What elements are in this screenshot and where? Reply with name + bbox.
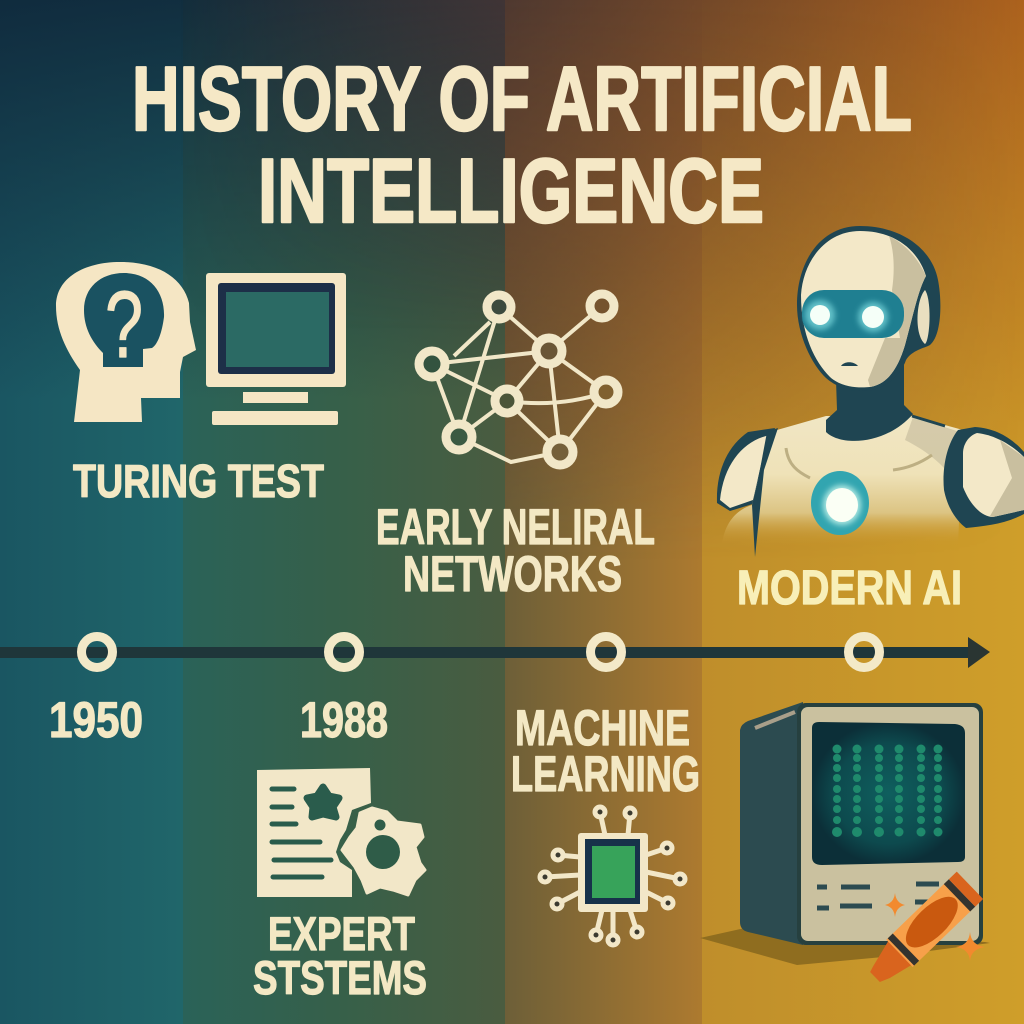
timeline marker 3 <box>590 636 622 668</box>
robot neck <box>826 365 913 441</box>
label: Machine Learning <box>511 700 700 802</box>
icon: robot <box>717 226 1024 557</box>
icon: vintage computer <box>700 702 990 965</box>
timeline marker 4 <box>848 636 880 668</box>
label: Expert Systems: EXPERT <box>268 907 415 960</box>
label: Machine Learning: LEARNING <box>511 746 700 802</box>
computer screen <box>812 722 965 865</box>
screen data columns <box>832 744 942 837</box>
label: Early Neural Networks: NETWORKS <box>403 546 622 602</box>
robot left arm <box>717 428 775 511</box>
timeline marker 2 <box>328 636 360 668</box>
label: Expert Systems: STSTEMS <box>253 951 427 1004</box>
robot head <box>797 226 940 391</box>
label: 1950: 1950 <box>49 692 143 748</box>
robot chest light <box>811 471 869 535</box>
robot right arm <box>944 427 1024 528</box>
computer front <box>797 703 983 945</box>
icon: neural network <box>419 294 618 465</box>
title <box>132 49 912 242</box>
label: 1988: 1988 <box>300 692 388 748</box>
label: Expert Systems <box>253 907 427 1004</box>
label: Machine Learning: MACHINE <box>515 700 690 756</box>
computer ground shadow <box>700 928 990 965</box>
title: INTELLIGENCE <box>258 141 764 242</box>
timeline axis with arrow <box>0 637 990 668</box>
robot visor <box>802 290 904 338</box>
icon: head with question mark <box>56 262 196 422</box>
icon: computer monitor <box>206 273 346 425</box>
icon: crayon logo <box>862 872 985 991</box>
icon: head with question mark: ? <box>105 272 143 378</box>
label: Early Neural Networks: EARLY NELIRAL <box>376 499 655 555</box>
crayon body <box>862 872 983 991</box>
icon: expert systems document and gear <box>257 768 425 897</box>
icon: microchip <box>540 807 685 945</box>
label: Early Neural Networks <box>376 499 655 602</box>
robot torso <box>722 416 963 545</box>
label: Modern AI: MODERN AI <box>737 562 962 615</box>
computer vents <box>817 884 939 908</box>
computer side <box>740 702 803 945</box>
crayon sparkles <box>885 893 905 917</box>
label: Turing Test: TURING TEST <box>73 455 324 507</box>
timeline marker 1 <box>82 636 112 668</box>
